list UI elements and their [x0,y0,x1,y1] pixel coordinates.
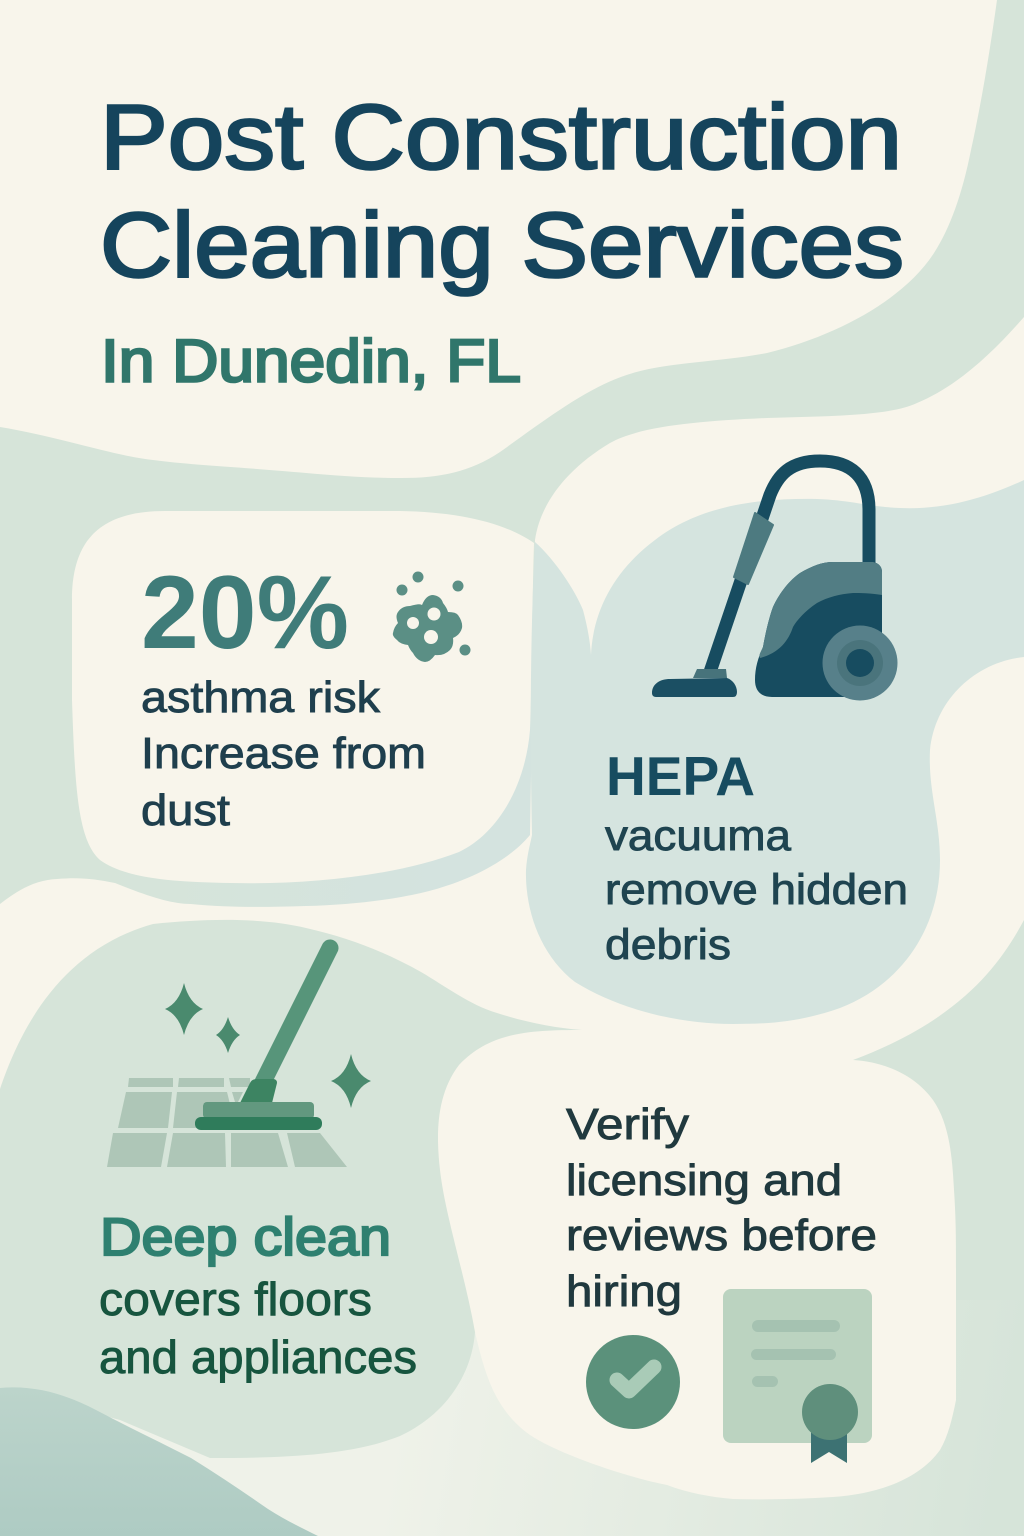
icon: sparkles [165,983,371,1108]
text: asthma risk description: Increase from [141,729,426,778]
text: HEPA description [605,812,908,969]
stat: 20%: 20% [141,555,349,671]
decorative corner blob [0,1387,318,1536]
text: HEPA description: debris [605,921,731,969]
text: HEPA description: remove hidden [605,866,908,914]
text: verify licensing: Verify [566,1100,689,1149]
text: asthma risk description [141,673,426,835]
icon: dust cloud [393,572,470,662]
icon: mop [195,948,330,1130]
panel: HEPA vacuums [526,461,1024,1024]
heading: HEPA: HEPA [606,745,755,807]
text: verify licensing: reviews before [566,1211,877,1260]
title [100,86,904,296]
heading: deep clean: Deep clean [100,1208,391,1267]
text: asthma risk description: dust [141,786,230,835]
panel: verify licensing [438,1030,956,1499]
icon: floor tiles [107,1078,347,1167]
text: asthma risk description: asthma risk [141,673,381,722]
subtitle: In Dunedin, FL [101,328,521,394]
text: verify licensing: licensing and [566,1156,842,1205]
text: deep clean description: and appliances [99,1331,417,1383]
text: deep clean description [99,1273,417,1383]
panel: deep clean [0,920,600,1458]
text: verify licensing: hiring [566,1267,682,1316]
icon: check mark [586,1335,680,1429]
icon: certificate [723,1289,872,1463]
icon: vacuum cleaner [652,461,898,700]
text: deep clean description: covers floors [99,1273,372,1325]
title: Cleaning Services [100,194,904,296]
panel: asthma risk [72,511,534,883]
text: HEPA description: vacuuma [605,812,791,860]
text: verify licensing [566,1100,877,1316]
title: Post Construction [100,86,902,188]
